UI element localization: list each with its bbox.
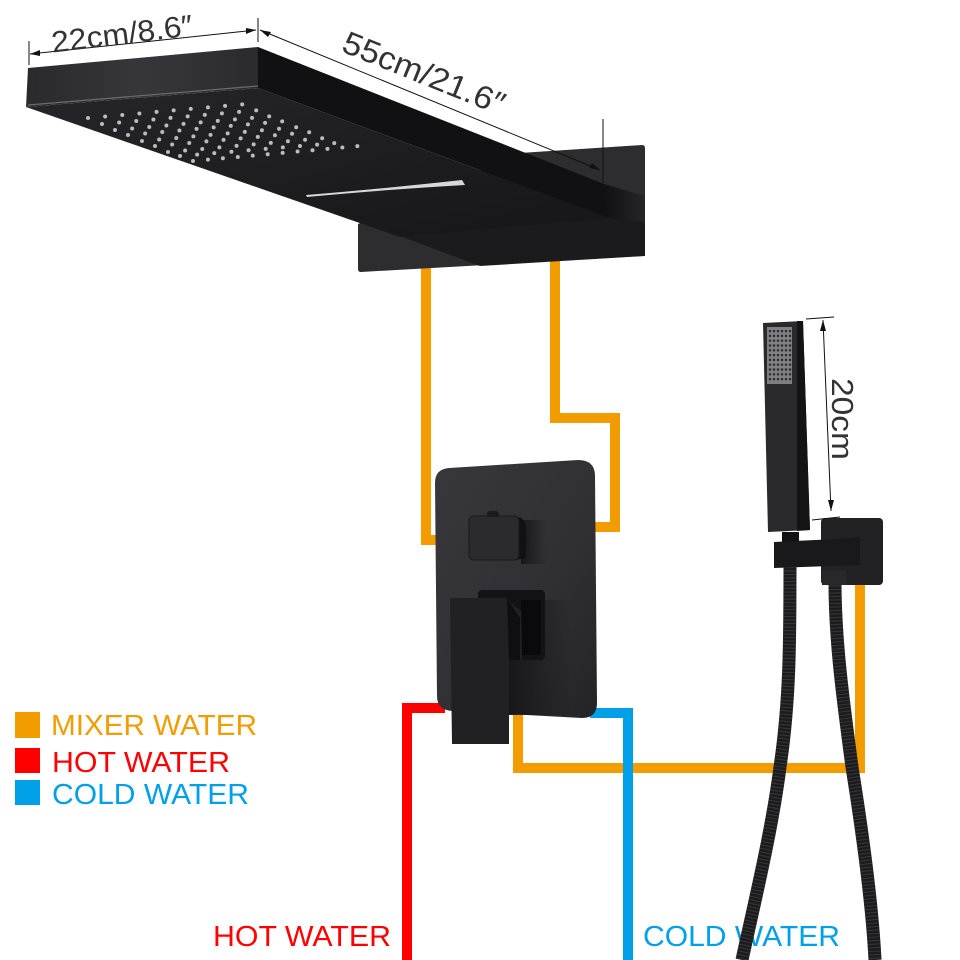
hand shower hoses <box>742 560 875 960</box>
pipes: mixer water <box>426 258 860 768</box>
legend <box>15 710 257 811</box>
diverter valve <box>435 460 597 744</box>
dimension: length 55cm: 55cm/21.6″ <box>338 24 510 122</box>
legend: mixer water: MIXER WATER <box>51 710 257 742</box>
handheld shower <box>763 321 810 532</box>
diverter knob <box>469 511 529 560</box>
label: cold water inlet: COLD WATER <box>643 921 840 953</box>
dimension: handheld 20cm: 20cm <box>825 378 860 460</box>
rain nozzles <box>88 103 359 161</box>
mixer lever <box>450 598 541 744</box>
wall plate <box>358 145 645 272</box>
underside with nozzles <box>26 88 609 237</box>
hand shower wall bracket <box>774 518 883 585</box>
front face <box>26 47 258 107</box>
dimension: width 22cm: 22cm/8.6″ <box>50 9 195 60</box>
spray grille <box>767 327 792 384</box>
dimension: handheld 20cm <box>806 317 860 520</box>
knob and lever shadows <box>509 520 571 715</box>
right side face <box>258 47 609 218</box>
dimension: length 55cm <box>260 24 603 183</box>
pipe: hot water <box>407 708 445 960</box>
valve plate <box>435 460 597 718</box>
pipe: cold water <box>590 713 628 960</box>
lever escutcheon <box>478 590 545 660</box>
waterfall outlet <box>306 180 465 197</box>
legend: hot water: HOT WATER <box>52 747 230 779</box>
overhead shower head <box>26 47 645 272</box>
dimension: width 22cm <box>29 9 258 65</box>
label: hot water inlet: HOT WATER <box>213 921 391 953</box>
legend: cold water: COLD WATER <box>52 779 249 811</box>
